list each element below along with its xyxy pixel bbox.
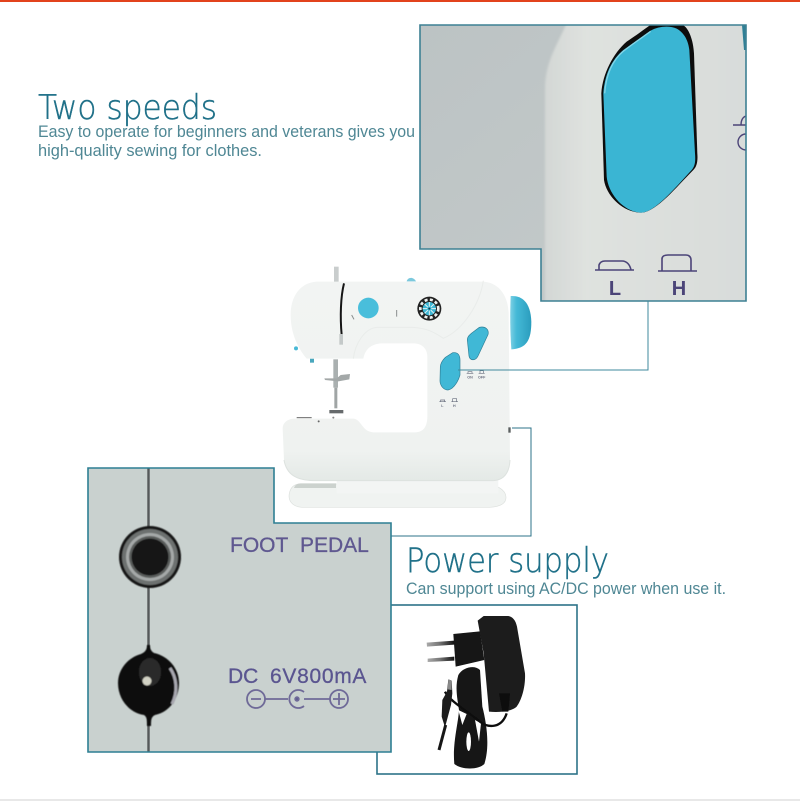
panel: speed switch detail: H	[672, 278, 686, 300]
heading: Two speeds: Two speeds	[38, 88, 217, 128]
side port	[508, 427, 511, 433]
sewing machine	[283, 267, 531, 507]
panel: power ports detail	[88, 468, 391, 760]
text block: two speeds description: high-quality sewing for clothes.	[38, 141, 262, 160]
leader line: speed switch to detail panel	[458, 301, 648, 370]
bottom divider	[0, 799, 800, 801]
switch labels: L	[441, 404, 444, 408]
adapter body	[478, 616, 525, 712]
presser foot and needle	[324, 359, 350, 413]
needle plate marks	[297, 416, 312, 419]
gaps in the coil	[466, 732, 471, 751]
speed icon labels L and H	[595, 116, 754, 271]
text block: two speeds description	[38, 122, 415, 160]
adapter: plug and cable	[427, 616, 525, 768]
DC barrel connector	[442, 679, 452, 727]
seam line	[147, 468, 150, 760]
icon: blue speed switch	[601, 24, 697, 213]
machine body	[283, 282, 510, 481]
plug neck	[453, 631, 484, 667]
power switch	[467, 327, 488, 360]
machine casing	[545, 20, 750, 305]
arm shading	[353, 281, 483, 359]
label: DC 6V800mA: 6V800mA	[270, 665, 367, 688]
foot pedal socket	[119, 526, 181, 588]
DC socket	[118, 645, 179, 726]
tension knob	[358, 298, 379, 318]
label: DC 6V800mA: DC	[228, 665, 258, 688]
panel border	[88, 468, 391, 752]
heading: Power supply: Power supply	[406, 541, 609, 581]
panel border	[420, 25, 746, 301]
thread guide	[341, 283, 344, 335]
adapter panel	[377, 605, 577, 774]
stitch dial	[417, 297, 441, 321]
switch labels: OFF	[478, 376, 486, 380]
loose cable	[445, 692, 507, 726]
switch labels: H	[453, 404, 456, 408]
top spool pin	[407, 278, 416, 281]
needle bar	[334, 267, 339, 283]
label: FOOT PEDAL: FOOT	[230, 534, 288, 557]
top accent bar	[0, 0, 800, 2]
coiled cable	[454, 667, 487, 768]
plug strain relief	[499, 693, 510, 712]
plug pins	[427, 641, 454, 647]
switch labels: ON	[467, 376, 473, 380]
text block: two speeds description: Easy to operate for beginners and veterans gives you	[38, 122, 415, 141]
stitch marks	[352, 310, 397, 319]
leader line: side port to detail panel	[391, 428, 531, 536]
label: FOOT PEDAL: PEDAL	[300, 534, 369, 557]
small blue parts	[294, 346, 298, 350]
switch labels	[439, 371, 486, 408]
text block: power supply description: Can support using AC/DC power when use it.	[406, 579, 726, 598]
hand wheel	[510, 296, 531, 349]
icon: polarity diagram	[247, 690, 348, 708]
speed switch	[440, 353, 460, 390]
panel: speed switch detail	[420, 20, 754, 305]
panel: speed switch detail: L	[609, 278, 621, 300]
base plate	[289, 484, 506, 507]
